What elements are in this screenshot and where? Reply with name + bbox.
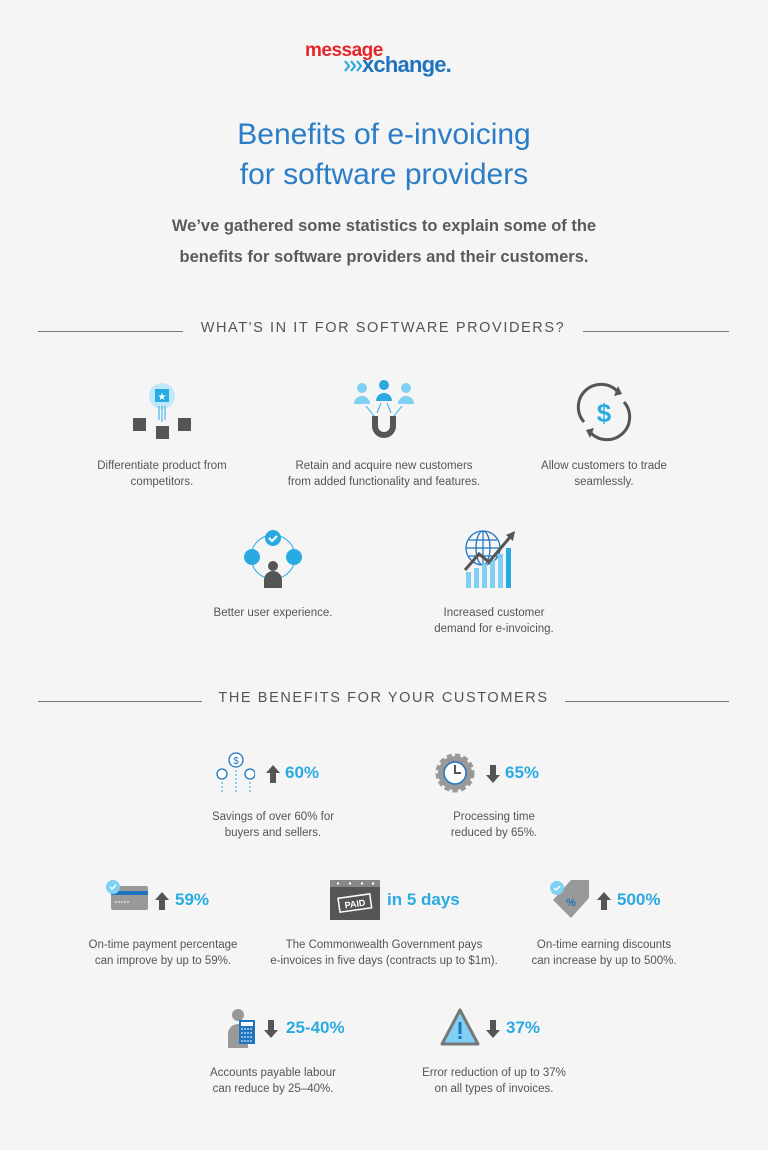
- stat: 25-40%: [228, 1009, 345, 1048]
- logo: message: [305, 40, 383, 61]
- text: differentiate: Differentiate product from: [97, 460, 227, 472]
- stat: in 5 days: in 5 days: [387, 890, 460, 909]
- text: accounts payable: Accounts payable labour: [210, 1067, 336, 1079]
- text: retain: from added functionality and features.: [288, 476, 480, 488]
- text: processing: Processing time: [453, 811, 535, 823]
- stat: 60%: [216, 752, 319, 792]
- text: demand: Increased customer: [444, 607, 544, 619]
- text: error reduction: on all types of invoices.: [435, 1083, 553, 1095]
- subtitle: [172, 217, 596, 266]
- title: Benefits of e-invoicing: [237, 118, 531, 151]
- stat: 37%: 37%: [506, 1018, 540, 1037]
- heading: software providers: WHAT'S IN IT FOR SOFTWARE PROVIDERS?: [201, 320, 565, 336]
- stat: 59%: [106, 880, 209, 910]
- text: savings: Savings of over 60% for: [212, 811, 334, 823]
- text: processing: [451, 811, 537, 839]
- text: trade: [541, 460, 667, 488]
- text: trade: seamlessly.: [574, 476, 634, 488]
- icon: user experience: [244, 530, 302, 588]
- stat: in 5 days: PAID: [344, 898, 367, 910]
- stat: 25-40%: 25-40%: [286, 1018, 345, 1037]
- icon: magnet customers: [354, 380, 414, 438]
- text: commonwealth: The Commonwealth Government pays: [286, 939, 482, 951]
- icon: dollar cycle: [576, 382, 632, 442]
- text: error reduction: Error reduction of up to 37%: [422, 1067, 566, 1079]
- icon: differentiate product: ★: [158, 392, 167, 403]
- text: accounts payable: [210, 1067, 336, 1095]
- text: on-time payment: can improve by up to 59%.: [95, 955, 231, 967]
- text: error reduction: [422, 1067, 566, 1095]
- title: [237, 118, 531, 191]
- stat: 59%: 59%: [175, 890, 209, 909]
- subtitle: We’ve gathered some statistics to explain some of the: [172, 217, 596, 235]
- icon: dollar cycle: $: [597, 398, 612, 428]
- subtitle: benefits for software providers and their customers.: [180, 248, 588, 266]
- text: on-time payment: On-time payment percentage: [89, 939, 237, 951]
- heading: customers: THE BENEFITS FOR YOUR CUSTOMERS: [218, 690, 549, 706]
- stat: 37%: [440, 1008, 540, 1046]
- stat: 60%: 60%: [285, 763, 319, 782]
- text: ux: Better user experience.: [214, 607, 332, 619]
- icon: differentiate product: [133, 383, 191, 439]
- stat: in 5 days: [330, 880, 460, 920]
- stat: 500%: [550, 880, 660, 918]
- text: demand: [434, 607, 554, 635]
- text: savings: [212, 811, 334, 839]
- stat: 60%: $: [233, 756, 239, 767]
- stat: 500%: 500%: [617, 890, 660, 909]
- stat: 65%: 65%: [505, 763, 539, 782]
- title: for software providers: [240, 158, 528, 191]
- stat: 500%: %: [566, 897, 576, 909]
- text: discounts: [531, 939, 677, 967]
- text: accounts payable: can reduce by 25–40%.: [213, 1083, 333, 1095]
- text: retain: [288, 460, 480, 488]
- text: commonwealth: e-invoices in five days (contracts up to $1m).: [270, 955, 498, 967]
- logo: [305, 40, 451, 77]
- text: discounts: On-time earning discounts: [537, 939, 671, 951]
- icon: growth chart: [464, 530, 515, 588]
- text: on-time payment: [89, 939, 237, 967]
- text: trade: Allow customers to trade: [541, 460, 667, 472]
- text: demand: demand for e-invoicing.: [434, 623, 554, 635]
- text: discounts: can increase by up to 500%.: [531, 955, 677, 967]
- text: differentiate: [97, 460, 227, 488]
- text: differentiate: competitors.: [131, 476, 193, 488]
- text: processing: reduced by 65%.: [451, 827, 537, 839]
- text: commonwealth: [270, 939, 498, 967]
- text: savings: buyers and sellers.: [225, 827, 321, 839]
- stat: 65%: [436, 754, 539, 792]
- text: retain: Retain and acquire new customers: [295, 460, 473, 472]
- logo: xchange.: [362, 52, 451, 77]
